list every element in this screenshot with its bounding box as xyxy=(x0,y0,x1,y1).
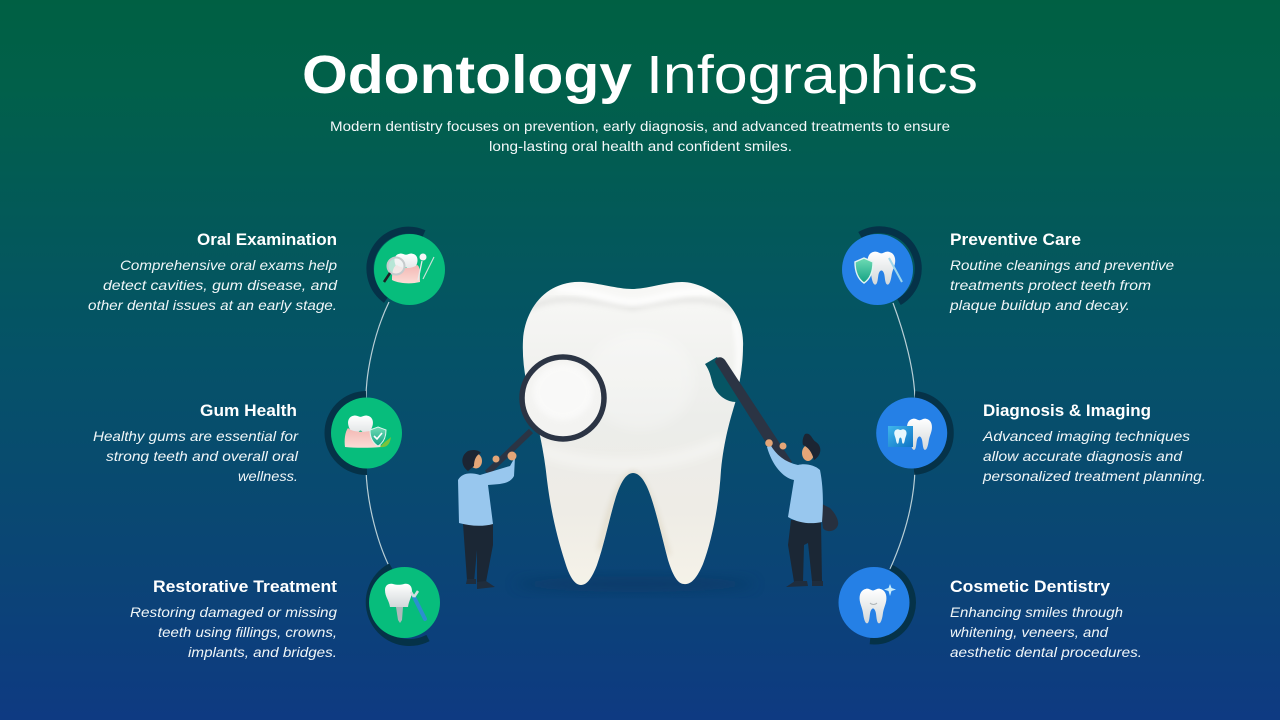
item: Preventive Care xyxy=(842,230,1174,313)
description xyxy=(949,257,1174,313)
title: Odontology xyxy=(302,45,632,105)
description: Healthy gums are essential for xyxy=(93,428,299,444)
large tooth xyxy=(523,282,743,585)
trousers xyxy=(463,524,493,582)
description: strong teeth and overall oral xyxy=(106,448,299,464)
hands xyxy=(765,439,773,447)
icon ring xyxy=(860,230,918,302)
description: Routine cleanings and preventive xyxy=(950,257,1174,273)
icon disc xyxy=(369,567,440,638)
item: Gum Health xyxy=(93,394,402,484)
title: Infographics xyxy=(646,45,978,105)
item: Cosmetic Dentistry xyxy=(838,567,1142,660)
icon: tooth exam xyxy=(384,253,434,283)
heading: Gum Health xyxy=(200,401,297,420)
description: other dental issues at an early stage. xyxy=(88,297,337,313)
icon disc xyxy=(374,234,445,305)
icon: tooth with shield xyxy=(855,252,902,285)
description: personalized treatment planning. xyxy=(982,468,1206,484)
icon ring xyxy=(328,394,367,472)
icon ring xyxy=(870,568,912,641)
description: detect cavities, gum disease, and xyxy=(103,277,338,293)
tooth ground shadow xyxy=(515,576,755,592)
description xyxy=(130,604,337,660)
description: wellness. xyxy=(238,468,298,484)
left connector arc xyxy=(366,302,391,570)
icon disc xyxy=(876,398,947,468)
description xyxy=(950,604,1142,660)
icon ring xyxy=(370,230,424,300)
icon: sparkling tooth xyxy=(860,584,896,623)
heading: Diagnosis & Imaging xyxy=(983,401,1151,420)
icon disc xyxy=(838,567,910,638)
shoes xyxy=(786,581,823,587)
illustration: tooth with dentists xyxy=(458,282,838,592)
description: teeth using fillings, crowns, xyxy=(158,624,337,640)
description: Enhancing smiles through xyxy=(950,604,1123,620)
shoes xyxy=(466,579,495,589)
description: allow accurate diagnosis and xyxy=(983,448,1183,464)
subtitle xyxy=(330,118,950,154)
heading: Oral Examination xyxy=(197,230,337,249)
shirt xyxy=(458,457,515,526)
item: Restorative Treatment xyxy=(130,566,440,660)
right connector arc xyxy=(890,303,915,569)
subtitle: Modern dentistry focuses on prevention, early diagnosis, and advanced treatments to ensure xyxy=(330,118,950,134)
tooth chip xyxy=(705,357,742,402)
icon disc xyxy=(842,234,913,305)
description: implants, and bridges. xyxy=(188,644,337,660)
brush handle xyxy=(715,357,838,531)
icon ring xyxy=(914,395,950,471)
subtitle: long-lasting oral health and confident smiles. xyxy=(489,138,792,154)
icon: dental implant xyxy=(385,584,425,623)
magnifying glass xyxy=(487,357,604,473)
description xyxy=(93,428,299,484)
description: whitening, veneers, and xyxy=(950,624,1109,640)
description: plaque buildup and decay. xyxy=(949,297,1130,313)
description: aesthetic dental procedures. xyxy=(950,644,1142,660)
left dentist xyxy=(458,450,516,589)
hands xyxy=(508,452,516,460)
icon disc xyxy=(331,398,402,468)
trousers xyxy=(788,520,822,582)
shirt xyxy=(767,444,823,523)
heading: Cosmetic Dentistry xyxy=(950,577,1111,596)
description xyxy=(982,428,1206,484)
description xyxy=(88,257,338,313)
description: Restoring damaged or missing xyxy=(130,604,337,620)
title xyxy=(302,45,978,105)
head xyxy=(802,445,814,461)
item: Diagnosis & Imaging xyxy=(876,395,1206,484)
icon ring xyxy=(369,566,428,643)
heading: Preventive Care xyxy=(950,230,1081,249)
icon: gum health xyxy=(345,415,391,448)
description: treatments protect teeth from xyxy=(950,277,1151,293)
item: Oral Examination xyxy=(88,230,445,313)
heading: Restorative Treatment xyxy=(153,577,337,596)
description: Advanced imaging techniques xyxy=(982,428,1190,444)
head xyxy=(470,454,482,468)
right dentist xyxy=(765,434,823,587)
icon: dental x-ray xyxy=(888,419,932,450)
description: Comprehensive oral exams help xyxy=(120,257,337,273)
